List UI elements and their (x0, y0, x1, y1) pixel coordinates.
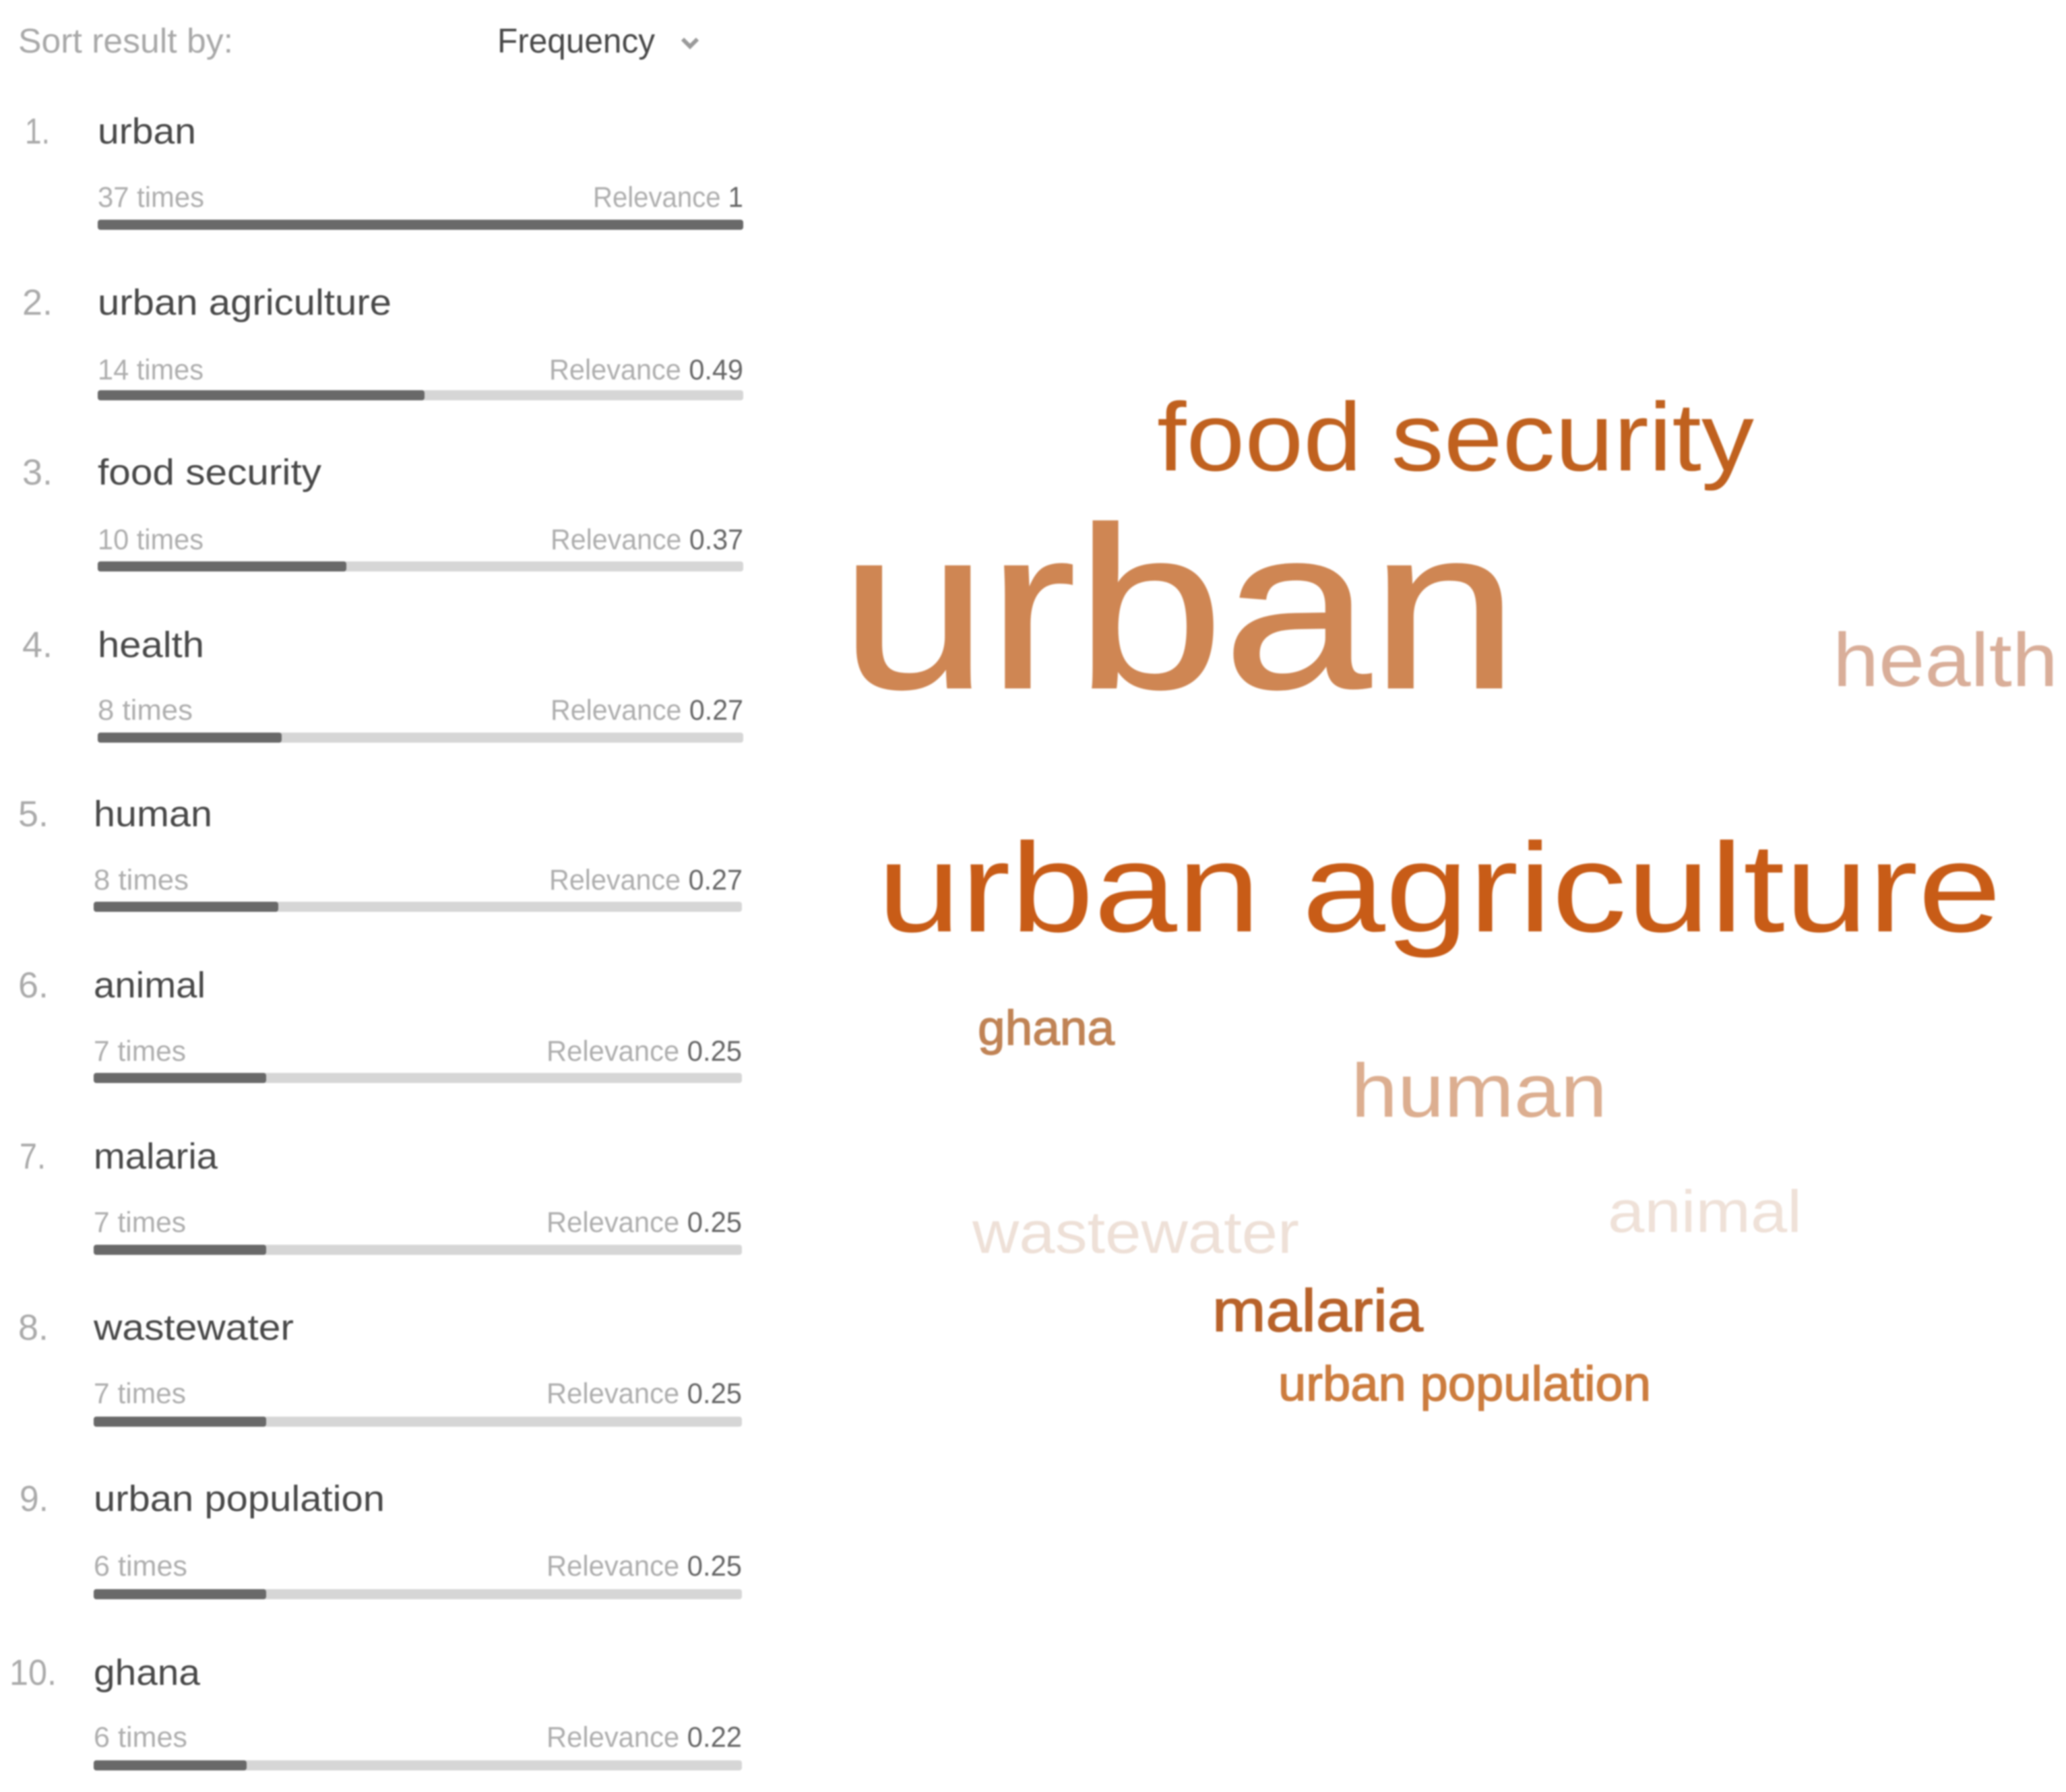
panel: word cloud (840, 383, 2058, 1411)
row 9: urban population: 6 times (94, 1550, 187, 1582)
row 1: urban: urban (98, 111, 196, 152)
row 2: urban agriculture: 2. (22, 282, 53, 323)
word: food security: food security (1157, 383, 1754, 491)
row 4: health: Relevance 0.27 (551, 694, 743, 727)
row 2: urban agriculture: Relevance 0.49 (549, 354, 743, 386)
row 10: ghana: 6 times (94, 1721, 187, 1754)
row 8: wastewater (18, 1307, 742, 1427)
word: malaria: malaria (1212, 1277, 1423, 1344)
row 1: urban (25, 111, 743, 230)
row 3: food security: food security (98, 452, 321, 493)
row 9: urban population: 9. (20, 1479, 49, 1519)
word: health: health (1833, 618, 2058, 702)
word: urban: urban (840, 481, 1518, 737)
row 7: malaria (20, 1136, 742, 1255)
row 2: urban agriculture: urban agriculture (98, 282, 392, 323)
row 8: wastewater: 7 times (94, 1378, 186, 1410)
row 4: health: health (98, 625, 204, 665)
row 7: malaria: 7 times (94, 1206, 186, 1239)
row 10: ghana: ghana (94, 1652, 201, 1693)
word: animal: animal (1608, 1178, 1802, 1245)
row 8: wastewater: Relevance 0.25 (546, 1378, 742, 1410)
row 1: urban: 37 times (98, 181, 204, 214)
row 9: urban population: urban population (94, 1479, 385, 1519)
panel: keyword ranking list (9, 22, 743, 1770)
row 8: wastewater: 8. (18, 1307, 49, 1348)
row 3: food security (22, 452, 743, 571)
icon: dropdown chevron (683, 39, 697, 47)
row 6: animal: animal (94, 965, 206, 1006)
row 10: ghana: Relevance 0.22 (546, 1721, 742, 1754)
row 2: urban agriculture (22, 282, 743, 400)
row 5: human: 8 times (94, 864, 189, 896)
row 5: human: human (94, 794, 212, 834)
word: ghana: ghana (978, 1001, 1115, 1055)
row 2: urban agriculture: 14 times (98, 354, 204, 386)
word: urban population: urban population (1278, 1357, 1651, 1411)
row 7: malaria: malaria (94, 1136, 218, 1177)
row 10: ghana (9, 1652, 742, 1770)
row 3: food security: 3. (22, 452, 53, 493)
row 4: health: 4. (22, 625, 53, 665)
sort label: Sort result by: (18, 22, 233, 60)
row 10: ghana: 10. (9, 1652, 57, 1693)
word: wastewater: wastewater (972, 1199, 1299, 1266)
row 5: human: 5. (18, 794, 49, 834)
row 5: human (18, 794, 743, 912)
row 5: human: Relevance 0.27 (549, 864, 743, 896)
sort dropdown value: Frequency (497, 22, 655, 60)
row 1: urban: Relevance 1 (593, 181, 743, 214)
word: human: human (1351, 1049, 1607, 1133)
row 6: animal: 7 times (94, 1035, 186, 1068)
row 7: malaria: 7. (20, 1136, 46, 1177)
row 3: food security: 10 times (98, 524, 204, 556)
row 4: health (22, 625, 743, 743)
row 6: animal: 6. (18, 965, 49, 1006)
row 9: urban population (20, 1479, 742, 1599)
row 6: animal (18, 965, 742, 1083)
row 7: malaria: Relevance 0.25 (546, 1206, 742, 1239)
row 4: health: 8 times (98, 694, 193, 727)
row 3: food security: Relevance 0.37 (551, 524, 743, 556)
row 9: urban population: Relevance 0.25 (546, 1550, 742, 1582)
word: urban agriculture: urban agriculture (877, 817, 2001, 958)
row 8: wastewater: wastewater (93, 1307, 294, 1348)
row 1: urban: 1. (25, 111, 50, 152)
row 6: animal: Relevance 0.25 (546, 1035, 742, 1068)
